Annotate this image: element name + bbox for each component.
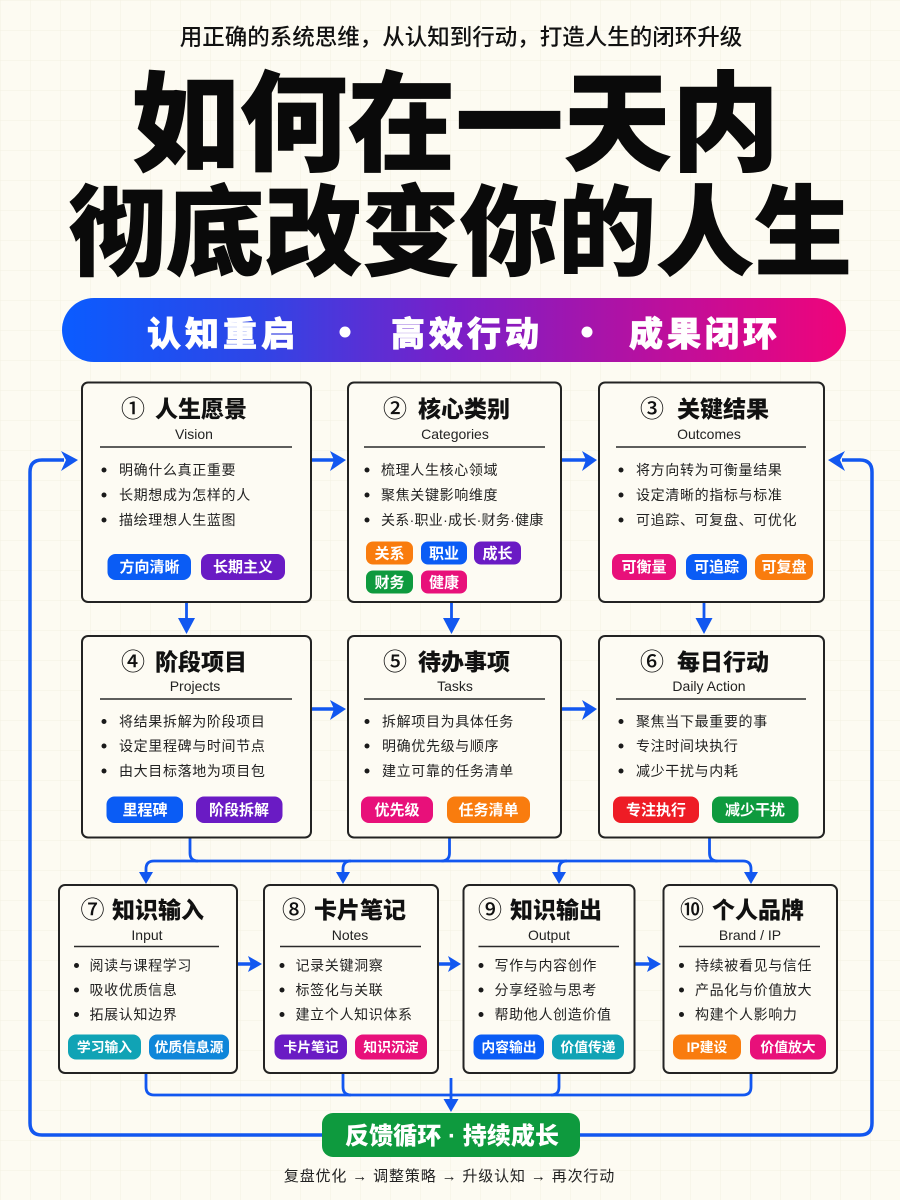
heading: ② <box>383 396 407 423</box>
bullet list: 将方向转为可衡量结果 <box>636 462 782 478</box>
tag <box>712 796 798 823</box>
bullet list: 梳理人生核心领域 <box>381 462 498 478</box>
heading: ④ <box>121 649 145 676</box>
bullet list <box>102 462 251 528</box>
tag: 可复盘 <box>761 558 807 576</box>
tag: 减少干扰 <box>725 801 785 819</box>
arrow: categories to tasks <box>443 602 460 634</box>
card 9: output <box>464 885 634 1073</box>
card 8: notes <box>264 885 438 1073</box>
heading: ⑥ <box>640 649 664 676</box>
bullet list: 产品化与价值放大 <box>695 982 812 998</box>
tag <box>68 1034 141 1060</box>
tag: 优先级 <box>374 801 420 819</box>
tag <box>421 570 467 594</box>
tag: 里程碑 <box>122 802 168 819</box>
tag <box>686 554 747 580</box>
heading: 关键结果 <box>677 396 769 422</box>
card 10: brand <box>664 885 837 1073</box>
bullet list: 构建个人影响力 <box>695 1006 798 1022</box>
tag: 学习输入 <box>77 1039 132 1055</box>
heading <box>640 649 769 676</box>
title <box>68 64 852 288</box>
card 7: input <box>59 885 237 1073</box>
heading: 人生愿景 <box>155 396 247 422</box>
tag: 价值放大 <box>760 1039 816 1055</box>
tag <box>447 796 530 823</box>
subtitle: 用正确的系统思维，从认知到行动，打造人生的闭环升级 <box>180 25 742 50</box>
heading <box>640 396 769 423</box>
english label: Projects <box>170 678 220 694</box>
tag <box>613 796 699 823</box>
heading: 知识输入 <box>112 897 204 923</box>
english label: Vision <box>175 426 213 442</box>
card 1: vision <box>82 382 311 602</box>
tag <box>474 1034 544 1060</box>
tag <box>196 796 282 823</box>
bullet list: 聚焦关键影响维度 <box>381 487 498 503</box>
arrow: projects to tasks <box>311 700 346 720</box>
arrow: categories to outcomes <box>561 451 597 471</box>
bullet list: 专注时间块执行 <box>636 738 739 754</box>
arrow: input to notes <box>237 956 262 972</box>
title: 彻底改变你的人生 <box>68 178 852 288</box>
banner: three themes: 成果闭环 <box>629 315 781 354</box>
tag: 关系 <box>374 544 405 562</box>
bullet list: 将结果拆解为阶段项目 <box>119 714 266 730</box>
bullet list: 记录关键洞察 <box>296 958 383 974</box>
title: 如何在一天内 <box>131 64 780 185</box>
arrow: feedback loop right <box>580 451 872 1135</box>
heading: 阶段项目 <box>155 649 247 675</box>
arrows: row 3 merge into feedback pill <box>146 1073 751 1112</box>
bullet list: 明确什么真正重要 <box>119 462 236 478</box>
bullet list <box>280 958 413 1022</box>
english label: Output <box>528 927 570 943</box>
heading: ⑦ <box>80 897 104 924</box>
tag <box>274 1034 347 1060</box>
heading <box>383 396 510 423</box>
english label: Notes <box>332 927 368 943</box>
bullet list: 写作与内容创作 <box>494 958 597 974</box>
tag <box>552 1034 624 1060</box>
tag: 知识沉淀 <box>363 1039 419 1055</box>
heading: 每日行动 <box>677 649 769 675</box>
tag: 健康 <box>429 574 459 592</box>
english label: Tasks <box>437 678 473 694</box>
tag <box>673 1034 741 1060</box>
tag: 职业 <box>429 546 459 562</box>
heading <box>383 649 510 676</box>
bullet list <box>364 714 514 779</box>
bullet list: 长期想成为怎样的人 <box>119 487 251 503</box>
tag: 可衡量 <box>621 558 667 576</box>
bullet list: 描绘理想人生蓝图 <box>119 512 236 528</box>
heading: ⑧ <box>282 897 306 924</box>
bullet list: 分享经验与思考 <box>494 982 597 998</box>
bullet list: 建立个人知识体系 <box>296 1006 413 1022</box>
tag: 成长 <box>482 544 513 562</box>
tag <box>355 1034 427 1060</box>
card 5: tasks <box>348 636 561 838</box>
arrow: notes to output <box>438 956 461 972</box>
bullet list: 拆解项目为具体任务 <box>382 714 514 730</box>
arrow: output to brand <box>635 956 661 972</box>
bullet list: 阅读与课程学习 <box>90 958 192 974</box>
tag <box>366 542 413 564</box>
arrow: vision to projects <box>178 602 195 634</box>
bullet list: 拓展认知边界 <box>90 1006 177 1022</box>
heading: ③ <box>640 396 664 423</box>
tag <box>421 542 467 564</box>
heading: ⑩ <box>680 897 704 924</box>
tag: 财务 <box>374 574 405 592</box>
tag: 价值传递 <box>560 1039 616 1055</box>
tag: 可追踪 <box>694 558 739 576</box>
tag <box>612 554 676 580</box>
heading: ⑨ <box>478 897 502 924</box>
bullet list <box>679 958 812 1022</box>
english label: Daily Action <box>672 678 746 694</box>
bullet list: 可追踪、可复盘、可优化 <box>636 512 797 528</box>
tag <box>366 570 413 594</box>
feedback loop pill <box>322 1113 580 1157</box>
heading: ⑤ <box>383 649 407 676</box>
footer steps: 复盘优化 → 调整策略 → 升级认知 → 再次行动 <box>284 1167 615 1185</box>
arrow: tasks to daily action <box>561 700 597 720</box>
bullet list <box>478 958 612 1022</box>
bullet list: 由大目标落地为项目包 <box>119 763 266 779</box>
bullet list: 聚焦当下最重要的事 <box>636 714 768 730</box>
tag: 卡片笔记 <box>283 1039 339 1055</box>
tag: 任务清单 <box>458 801 519 819</box>
arrow: vision to categories <box>311 451 346 471</box>
card 6: daily action <box>599 636 824 838</box>
bullet list: 关系·职业·成长·财务·健康 <box>381 512 544 528</box>
tag: 阶段拆解 <box>209 801 269 819</box>
bullet list: 明确优先级与顺序 <box>382 738 499 754</box>
tag <box>201 554 285 580</box>
bullet list: 建立可靠的任务清单 <box>382 763 514 779</box>
card 2: categories <box>348 382 561 602</box>
heading: 核心类别 <box>418 396 510 422</box>
tag <box>149 1034 229 1060</box>
tag <box>474 542 521 564</box>
bullet list <box>102 714 266 779</box>
heading: 个人品牌 <box>712 897 804 923</box>
english label: Outcomes <box>677 426 741 442</box>
tag <box>755 554 813 580</box>
tag <box>106 796 183 823</box>
english label: Input <box>131 927 163 943</box>
tag: IP建设 <box>687 1039 728 1055</box>
english label: Categories <box>421 426 489 442</box>
bullet list <box>618 714 768 779</box>
bullet list: 持续被看见与信任 <box>695 958 812 974</box>
bullet list <box>74 958 192 1022</box>
arrow: feedback loop left <box>30 451 322 1135</box>
heading: 卡片笔记 <box>314 897 406 923</box>
tag <box>108 554 191 580</box>
tag: 方向清晰 <box>119 558 180 576</box>
bullet list <box>618 462 797 528</box>
bullet list: 吸收优质信息 <box>90 982 177 998</box>
tag <box>361 796 433 823</box>
english label: Brand / IP <box>719 927 781 943</box>
banner: three themes: 认知重启 <box>147 316 299 354</box>
tag: 长期主义 <box>213 558 273 576</box>
bullet list <box>364 462 544 528</box>
tag: 专注执行 <box>626 801 686 819</box>
heading: 知识输出 <box>510 897 602 923</box>
bullet list: 标签化与关联 <box>296 982 383 998</box>
tag <box>750 1034 826 1060</box>
card 4: projects <box>82 636 311 838</box>
feedback loop pill: 反馈循环 · 持续成长 <box>345 1122 559 1150</box>
banner: three themes <box>62 298 846 362</box>
banner: three themes: 高效行动 <box>391 316 543 354</box>
arrow: outcomes to daily action <box>696 602 712 634</box>
card 3: outcomes <box>599 382 824 602</box>
tag: 优质信息源 <box>155 1039 224 1055</box>
arrows: row 2 merge into row 3 <box>139 838 758 884</box>
bullet list: 减少干扰与内耗 <box>636 763 739 779</box>
heading: 待办事项 <box>418 649 510 675</box>
bullet list: 帮助他人创造价值 <box>494 1006 612 1022</box>
bullet list: 设定清晰的指标与标准 <box>636 487 782 503</box>
heading: ① <box>121 396 145 423</box>
tag: 内容输出 <box>481 1039 537 1055</box>
bullet list: 设定里程碑与时间节点 <box>119 738 266 754</box>
